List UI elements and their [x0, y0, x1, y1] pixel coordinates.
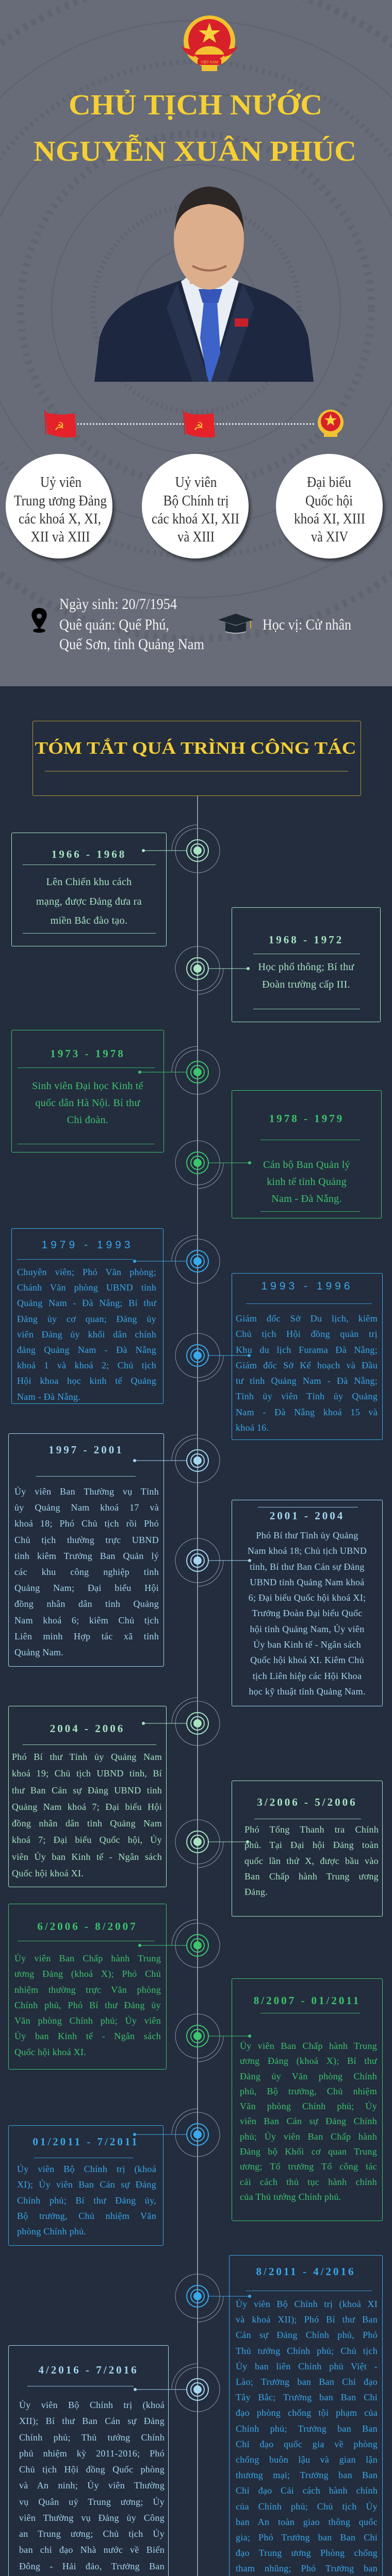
node: 3/2006 — [175, 1820, 249, 1868]
box: 8/2011-4/2016: Chỉ đạo Cải cách hành chính — [236, 2485, 378, 2496]
box: 01/2011-7/2011: Bộ trưởng, Chủ nhiệm Văn — [17, 2211, 156, 2221]
circle: Dai bieu Quoc hoi: Đại biểu — [307, 474, 351, 490]
box: 8/2011-4/2016: Cán sự Đảng Chính phủ, Phó — [236, 2330, 378, 2340]
box: 8/2007-01/2011: của Thủ tướng Chính phủ. — [240, 2192, 341, 2202]
icon: national emblem top: VIỆT NAM — [201, 60, 219, 64]
box: 2001-2004: 2001 - 2004 — [270, 1510, 345, 1522]
box: 4/2016-7/2016: 4/2016 - 7/2016 — [38, 2364, 139, 2376]
box: 1978-1979: Cán bộ Ban Quản lý — [263, 1159, 350, 1171]
box: 01/2011-7/2011: Ủy viên Bộ Chính trị (khoá — [17, 2164, 156, 2174]
box: 1973-1978 — [11, 1030, 164, 1153]
box: 6/2006-8/2007 — [8, 1904, 167, 2070]
box: 1973-1978: quốc dân Hà Nội. Bí thư — [35, 1097, 140, 1109]
education text: Học vị: Cử nhân — [263, 616, 351, 633]
box: 1979-1993: Hội khoa học kinh tế Quảng — [17, 1376, 156, 1386]
box: 1997-2001: Liên minh Hợp tác xã tỉnh — [14, 1631, 159, 1641]
birth and hometown text: Quê quán: Quế Phú, — [59, 616, 169, 633]
box: 1993-1996: khoá 16. — [236, 1422, 269, 1433]
box: 8/2011-4/2016: Ủy viên Bộ Chính trị (khoá XI — [236, 2299, 378, 2309]
circle: Uy vien TU Dang: XII và XIII — [31, 529, 90, 545]
box: 1979-1993: khoá 1 và khoá 2; Chủ tịch — [17, 1360, 156, 1370]
box: 1997-2001: các khu công nghiệp tỉnh — [14, 1567, 159, 1577]
box: 2004-2006: đồng nhân dân tỉnh Quảng Nam — [12, 1818, 162, 1828]
title — [34, 89, 356, 167]
box: 1979-1993: Chánh Văn phòng UBND tỉnh — [17, 1282, 156, 1293]
box: 6/2006-8/2007: Văn phòng Chính phủ; Ủy viên — [14, 2015, 161, 2026]
box: 4/2016-7/2016: Đông - Hải đảo, Trưởng Ban — [19, 2561, 165, 2571]
box: 8/2007-01/2011: cải cách thủ tục hành chính — [240, 2177, 377, 2187]
birth and hometown text — [59, 596, 204, 653]
box: 2001-2004: Phó Bí thư Tỉnh ủy Quảng — [256, 1530, 358, 1540]
box: 3/2006-5/2006: 3/2006 - 5/2006 — [257, 1796, 357, 1808]
box: 1997-2001: đồng nhân dân tỉnh Quảng — [14, 1599, 159, 1609]
node: 4/2016 — [134, 2364, 220, 2412]
box: 8/2011-4/2016: Ủy ban liên Chính phủ Việt - — [236, 2361, 378, 2371]
box: 1979-1993: Quảng Nam - Đà Nẵng; Bí thư — [17, 1298, 156, 1308]
heading: Tom tat qua trinh cong tac — [32, 721, 361, 796]
box: 6/2006-8/2007: 6/2006 - 8/2007 — [37, 1920, 138, 1933]
node: 1997 — [133, 1435, 220, 1483]
node: 1968 — [175, 946, 250, 994]
box: 3/2006-5/2006: Ban Chấp hành Trung ương — [244, 1871, 379, 1882]
title: CHỦ TỊCH NƯỚC — [69, 89, 322, 121]
box: 8/2007-01/2011: Đảng ủy Văn phòng Chính — [240, 2071, 377, 2081]
icon: party flag 1: ☭ — [54, 420, 64, 433]
box: 2001-2004: tịch Liên hiệp các Hội Khoa — [253, 1671, 362, 1681]
box: 8/2007-01/2011: Văn phòng Chính phủ; Ủy — [240, 2101, 377, 2111]
box: 1997-2001 — [8, 1433, 164, 1667]
portrait illustration — [94, 187, 314, 382]
birth and hometown text: Quế Sơn, tỉnh Quảng Nam — [59, 636, 204, 653]
box: 8/2007-01/2011: Đảng bộ Khối cơ quan Trung — [240, 2146, 377, 2157]
icon: party flag 1 — [45, 410, 76, 437]
node: 2004 — [142, 1698, 220, 1745]
box: 1968-1972: Đoàn trường cấp III. — [262, 979, 350, 990]
box: 4/2016-7/2016: viên Thường vụ Đảng ủy Công — [19, 2513, 165, 2523]
circle: Dai bieu Quoc hoi: khoá XI, XIII — [294, 511, 365, 527]
box: 2004-2006: Phó Bí thư Tỉnh ủy Quảng Nam — [12, 1752, 162, 1762]
box: 1968-1972: Học phổ thông; Bí thư — [258, 961, 354, 973]
box: 2001-2004 — [232, 1500, 383, 1706]
box: 3/2006-5/2006: Đảng. — [244, 1887, 268, 1897]
timeline center line — [197, 796, 198, 2576]
box: 6/2006-8/2007: Chính phủ, Phó Bí thư Đảng ủy — [14, 2000, 161, 2010]
box: 3/2006-5/2006: Phó Tổng Thanh tra Chính — [244, 1824, 379, 1835]
circle: Uy vien Bo Chinh tri: các khoá XI, XII — [152, 511, 239, 527]
box: 8/2007-01/2011: phủ; Ủy viên Ban Chấp hành — [240, 2131, 377, 2142]
box: 4/2016-7/2016: Chủ tịch Hội đồng Quốc phòng — [19, 2464, 165, 2475]
box: 3/2006-5/2006: quốc lần thứ X, được bầu vào — [244, 1856, 379, 1866]
box: 1993-1996: 1993 - 1996 — [261, 1280, 353, 1292]
box: 8/2011-4/2016: Thủ tướng Chính phủ; Chủ tịch — [236, 2346, 378, 2356]
node: 1978 — [175, 1141, 251, 1189]
box: 1997-2001: 1997 - 2001 — [48, 1444, 124, 1456]
box: 2001-2004: tỉnh, Bí thư Ban Cán sự Đảng — [250, 1562, 365, 1572]
box: 6/2006-8/2007: Ủy ban Kinh tế - Ngân sách — [14, 2031, 161, 2041]
box: 8/2007-01/2011 — [232, 1978, 383, 2221]
box: 1979-1993: viên Đảng ủy khối dân chính — [17, 1329, 156, 1340]
box: 6/2006-8/2007: nhiệm thường trực Văn phòng — [14, 1985, 161, 1995]
heading: Tom tat qua trinh cong tac: TÓM TẮT QUÁ TRÌNH CÔNG TÁC — [35, 738, 356, 757]
box: 1978-1979: Nam - Đà Nẵng. — [271, 1193, 342, 1205]
box: 8/2011-4/2016: Lào; Trưởng ban Ban Chỉ đạo — [236, 2377, 378, 2387]
flags row — [44, 410, 344, 438]
title: NGUYỄN XUÂN PHÚC — [34, 134, 356, 167]
box: 4/2016-7/2016: vụ Quân uỷ Trung ương; Ủy — [19, 2497, 165, 2507]
box: 8/2011-4/2016: của Chính phủ; Chủ tịch Ủy — [236, 2501, 378, 2512]
box: 2001-2004: Ủy ban Kinh tế - Ngân sách — [253, 1639, 361, 1650]
box: 8/2011-4/2016: đạo phòng chống tội phạm của — [236, 2408, 378, 2418]
box: 01/2011-7/2011 — [8, 2125, 164, 2246]
box: 1978-1979: 1978 - 1979 — [269, 1112, 344, 1125]
box: 1978-1979 — [232, 1090, 382, 1218]
node: 8/2011 — [175, 2274, 251, 2322]
box: 2001-2004: hội tỉnh Quảng Nam, Ủy viên — [250, 1624, 365, 1634]
icon: small emblem — [318, 410, 344, 437]
box: 4/2016-7/2016: ban chỉ đạo Nhà nước về Biển — [19, 2545, 165, 2555]
box: 8/2011-4/2016: Tây Bắc; Trưởng ban Ban Chỉ — [236, 2392, 378, 2402]
box: 1973-1978: Sinh viên Đại học Kinh tế — [32, 1080, 143, 1092]
box: 2004-2006: viên Ủy ban Kinh tế - Ngân sách — [12, 1852, 162, 1862]
box: 8/2007-01/2011: ương Đảng (khoá X); Bí thư — [240, 2056, 377, 2066]
box: 2001-2004: Trưởng Đoàn Đại biểu Quốc — [252, 1608, 363, 1618]
circle: Dai bieu Quoc hoi: Quốc hội — [305, 493, 353, 509]
box: 1997-2001: khoá 18; Phó Chủ tịch rồi Phó — [14, 1518, 159, 1529]
box: 8/2011-4/2016: thương mại; Trưởng ban Ban — [236, 2470, 378, 2480]
header section background — [0, 0, 392, 686]
box: 2004-2006: thư Ban Cán sự Đảng UBND tỉnh — [12, 1785, 162, 1795]
box: 1993-1996: Chủ tịch Hội đồng quản trị — [236, 1329, 378, 1339]
box: 1997-2001: Quảng Nam; Đại biểu Hội — [14, 1583, 159, 1593]
box: 2004-2006: Quốc hội khoá XI. — [12, 1868, 84, 1878]
node: 1993 — [175, 1333, 251, 1381]
node: 1966 — [142, 825, 220, 873]
box: 2001-2004: Nam khoá 18; Chủ tịch UBND — [248, 1546, 367, 1556]
box: 1979-1993: đảng Quảng Nam - Đà Nẵng — [17, 1345, 156, 1355]
box: 8/2011-4/2016: chống buôn lậu và gian lận — [236, 2454, 378, 2465]
icon: party flag 2: ☭ — [193, 420, 204, 433]
box: 6/2006-8/2007: Quốc hội khoá XI. — [14, 2047, 86, 2057]
circle: Uy vien TU Dang: các khoá X, XI, — [19, 511, 101, 527]
box: 8/2011-4/2016: ban An toàn giao thông quốc — [236, 2517, 378, 2527]
box: 8/2007-01/2011: Ủy viên Ban Chấp hành Trung — [240, 2041, 377, 2051]
box: 8/2011-4/2016: gia; Phó Trưởng ban Ban Chỉ — [236, 2532, 378, 2543]
personal info — [31, 596, 351, 653]
node: 8/2007 — [175, 2014, 251, 2062]
box: 1966-1968: 1966 - 1968 — [52, 848, 126, 860]
box: 8/2007-01/2011: viên Ban Cán sự Đảng Chính — [240, 2116, 377, 2126]
box: 1966-1968 — [11, 833, 167, 946]
icon: party flag 2 — [184, 410, 215, 437]
box: 8/2011-4/2016: Chỉ đạo quốc gia về phòng — [236, 2439, 378, 2449]
box: 4/2016-7/2016 — [8, 2345, 169, 2576]
box: 8/2007-01/2011: ương; Tổ trưởng Tổ công tác — [240, 2161, 377, 2172]
box: 1993-1996: Khu du lịch Furama Đà Nẵng; — [236, 1345, 378, 1355]
box: 2001-2004: Quốc hội khoá XI. Kiêm Chủ — [250, 1655, 364, 1665]
box: 1973-1978: Chi đoàn. — [67, 1114, 108, 1126]
box: 1993-1996: Nam - Đà Nẵng khoá 15 và — [236, 1407, 378, 1417]
circle: Uy vien TU Dang — [6, 454, 112, 558]
box: 1993-1996 — [232, 1273, 383, 1440]
node: 1973 — [138, 1046, 220, 1094]
box: 4/2016-7/2016: Ủy viên Bộ Chính trị (khoá — [19, 2400, 165, 2410]
box: 1979-1993 — [11, 1228, 164, 1404]
circle: Dai bieu Quoc hoi: và XIV — [311, 529, 348, 545]
node: 1979 — [133, 1235, 220, 1283]
box: 01/2011-7/2011: 01/2011 - 7/2011 — [32, 2136, 139, 2148]
box: 1997-2001: Ủy viên Ban Thường vụ Tỉnh — [14, 1486, 159, 1497]
box: 01/2011-7/2011: Chính phủ; Bí thư Đảng ủy, — [17, 2195, 156, 2206]
box: 3/2006-5/2006 — [232, 1781, 383, 1917]
box: 8/2011-4/2016 — [229, 2255, 383, 2576]
box: 6/2006-8/2007: Ủy viên Ban Chấp hành Trung — [14, 1953, 161, 1963]
node: 01/2011 — [133, 2109, 220, 2157]
circle: Uy vien Bo Chinh tri: Bộ Chính trị — [163, 493, 229, 509]
box: 2004-2006 — [8, 1706, 167, 1887]
box: 01/2011-7/2011: XI); Ủy viên Ban Cán sự Đảng — [17, 2179, 156, 2190]
box: 1979-1993: Chuyên viên; Phó Văn phòng; — [17, 1267, 156, 1277]
box: 1997-2001: Quảng Nam. — [14, 1647, 63, 1657]
box: 8/2011-4/2016: Chính phủ; Trưởng ban Ban — [236, 2424, 378, 2434]
icon: location pin — [31, 608, 47, 633]
box: 1968-1972: 1968 - 1972 — [269, 934, 344, 946]
box: 1997-2001: ủy Quảng Nam khoá 17 và — [14, 1502, 159, 1513]
box: 2004-2006: khoá 19; Chủ tịch UBND tỉnh, Bí — [12, 1768, 162, 1778]
box: 2004-2006: 2004 - 2006 — [50, 1722, 125, 1735]
box: 1993-1996: Giám đốc Sở Du lịch, kiêm — [236, 1313, 378, 1324]
box: 4/2016-7/2016: phủ nhiệm kỳ 2011-2016; Phó — [19, 2448, 165, 2459]
box: 1979-1993: 1979 - 1993 — [41, 1239, 134, 1251]
box: 2004-2006: Quảng Nam khoá 7; Đại biểu Hội — [12, 1802, 162, 1812]
box: 1997-2001: Chủ tịch thường trực UBND — [14, 1535, 159, 1545]
icon: national emblem top — [181, 15, 238, 71]
box: 2001-2004: UBND tỉnh Quảng Nam khoá — [250, 1577, 365, 1587]
birth and hometown text: Ngày sinh: 20/7/1954 — [59, 596, 177, 613]
box: 1978-1979: kinh tế tỉnh Quảng — [267, 1176, 347, 1188]
box: 4/2016-7/2016: Chính phủ; Thủ tướng Chính — [19, 2432, 165, 2442]
box: 8/2011-4/2016: 8/2011 - 4/2016 — [256, 2265, 356, 2278]
box: 1966-1968: Lên Chiến khu cách — [46, 876, 132, 888]
box: 2001-2004: học kỹ thuật tỉnh Quảng Nam. — [249, 1686, 366, 1697]
box: 4/2016-7/2016: và An ninh; Ủy viên Thường — [19, 2480, 165, 2490]
circle: Uy vien TU Dang: Uỷ viên — [40, 474, 81, 490]
box: 1993-1996: Tỉnh ủy viên Tỉnh ủy Quảng — [236, 1391, 378, 1401]
box: 8/2011-4/2016: đạo Trung ương Phòng chống — [236, 2548, 378, 2558]
box: 8/2007-01/2011: 8/2007 - 01/2011 — [254, 1994, 361, 2007]
circle: Dai bieu Quoc hoi — [276, 454, 383, 558]
box: 8/2011-4/2016: tham nhũng; Phó Trưởng ban — [236, 2563, 378, 2573]
box: 1966-1968: miền Bắc đào tạo. — [51, 915, 127, 926]
box: 8/2011-4/2016: và khoá XII); Phó Bí thư Ban — [236, 2314, 378, 2325]
box: 01/2011-7/2011: phòng Chính phủ. — [17, 2226, 86, 2236]
circle: Uy vien Bo Chinh tri: Uỷ viên — [175, 474, 217, 490]
box: 1979-1993: Nam - Đà Nẵng. — [17, 1392, 80, 1402]
box: 3/2006-5/2006: phủ. Tại Đại hội Đảng toàn — [244, 1840, 379, 1850]
box: 1997-2001: Nam khoá 6; kiêm Chủ tịch — [14, 1615, 159, 1625]
box: 6/2006-8/2007: ương Đảng (khoá X); Phó Chủ — [14, 1969, 161, 1979]
box: 8/2007-01/2011: phủ, Bộ trưởng, Chủ nhiệm — [240, 2086, 377, 2096]
box: 2001-2004: 6; Đại biểu Quốc hội khoá XI; — [249, 1592, 366, 1603]
box: 4/2016-7/2016: XII); Bí thư Ban Cán sự Đảng — [19, 2416, 165, 2426]
node: 2001 — [175, 1538, 251, 1586]
circle: Uy vien Bo Chinh tri: và XIII — [177, 529, 215, 545]
box: 1966-1968: mạng, được Đảng đưa ra — [36, 895, 142, 907]
box: 2004-2006: khoá 7; Đại biểu Quốc hội, Ủy — [12, 1835, 162, 1845]
box: 1973-1978: 1973 - 1978 — [50, 1047, 125, 1060]
box: 1997-2001: tỉnh kiêm Trưởng Ban Quản lý — [14, 1551, 159, 1561]
icon: graduation cap — [218, 614, 253, 633]
box: 1993-1996: Giám đốc Sở Kế hoạch và Đầu — [236, 1360, 378, 1370]
box: 1979-1993: Đảng ủy cơ quan; Đảng ủy — [17, 1314, 156, 1324]
box: 1993-1996: tư tỉnh Quảng Nam - Đà Nẵng; — [236, 1376, 378, 1386]
box: 4/2016-7/2016: an Trung ương; Chủ tịch Ủy — [19, 2529, 165, 2539]
box: 1968-1972 — [232, 907, 381, 1022]
node: 6/2006 — [138, 1920, 220, 1968]
circle: Uy vien Bo Chinh tri — [142, 454, 249, 558]
